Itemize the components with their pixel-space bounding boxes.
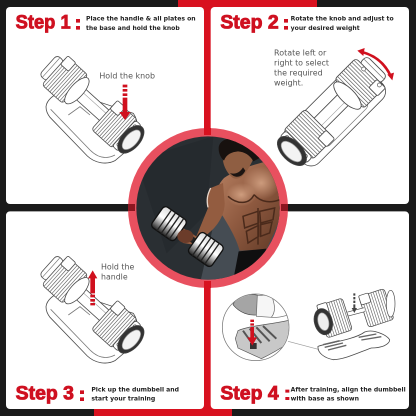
step 2 instructions: your desired weight: [291, 25, 360, 32]
label: hold the handle: Hold the: [101, 261, 134, 271]
step 4 instructions: [291, 386, 406, 403]
step 2 instructions: Rotate the knob and adjust to: [291, 16, 394, 23]
photo: athlete curling dumbbell: [133, 133, 283, 283]
torso: [216, 161, 281, 251]
arrow: down to knob: [119, 85, 131, 120]
step 4 instructions: with base as shown: [291, 396, 359, 403]
label: rotate instructions: [274, 47, 330, 87]
step 1 heading: Step 1: [16, 12, 71, 33]
icon: dumbbell above base: [311, 288, 395, 360]
arrow: up to handle: [88, 270, 97, 305]
label: hold the handle: handle: [101, 271, 128, 281]
label: rotate instructions: weight.: [274, 77, 303, 87]
step 3 instructions: [91, 386, 179, 403]
dumbbell: [150, 205, 225, 268]
icon: dumbbell lifted: [35, 250, 151, 363]
panel: step 4: [211, 211, 409, 409]
step 2 heading: Step 2: [220, 12, 279, 33]
step 1 instructions: the base and hold the knob: [86, 25, 180, 32]
label: rotate instructions: the required: [274, 67, 323, 77]
icon: inset detail circle: [222, 294, 320, 361]
hand: [177, 230, 193, 243]
label: hold the knob: Hold the knob: [99, 71, 155, 81]
step 1 instructions: Place the handle & all plates on: [86, 16, 196, 23]
central photo medallion: [128, 128, 288, 288]
label: rotate instructions: Rotate left or: [274, 47, 327, 57]
arrow: rotate curved: [357, 48, 394, 80]
step 4 instructions: After training, align the dumbbell: [291, 386, 406, 393]
label: hold the handle: [101, 261, 134, 281]
label: rotate instructions: right to select: [274, 57, 330, 67]
step 3 instructions: Pick up the dumbbell and: [91, 386, 179, 393]
icon: dumbbell on base: [35, 50, 151, 163]
arm: [182, 183, 224, 244]
panel: step 2: [211, 7, 409, 204]
shorts: [234, 248, 266, 275]
head: [223, 148, 254, 179]
panel: step 3: [6, 211, 204, 409]
arrow: inset down: [247, 320, 257, 346]
icon: dumbbell rotated on base: [270, 52, 392, 173]
arrow: dumbbell to base: [352, 293, 357, 313]
step 2 instructions: [291, 16, 394, 32]
step 3 heading: Step 3: [16, 384, 74, 405]
step 4 heading: Step 4: [220, 384, 279, 405]
panel: step 1: [6, 7, 204, 204]
step 1 instructions: [86, 16, 196, 32]
step 3 instructions: start your training: [91, 396, 155, 403]
muscle shading: [228, 195, 280, 245]
